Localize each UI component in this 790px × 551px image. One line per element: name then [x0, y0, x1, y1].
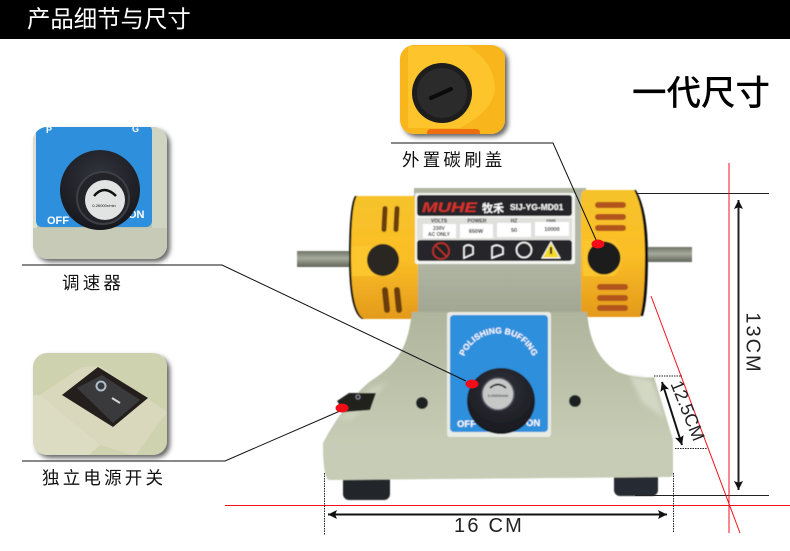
header bar: [0, 0, 790, 39]
inset: speed controller: G: [132, 124, 139, 134]
rating plate: 50: [511, 228, 517, 234]
inset: power switch: [33, 353, 167, 456]
label: carbon brush cover: 外置碳刷盖: [402, 147, 506, 172]
control plate: OFF: [457, 419, 476, 430]
page title: 产品细节与尺寸: [27, 0, 191, 34]
carbon brush cap: [588, 242, 620, 274]
rating plate: POWER: [468, 218, 487, 224]
dimension: width 16 CM: 16 CM: [454, 515, 524, 537]
screws: [416, 395, 581, 409]
rating plate: [415, 193, 575, 264]
left yellow end cap: [349, 196, 418, 319]
leader: speed controller: [22, 265, 466, 381]
right shaft: [645, 247, 692, 262]
label: independent power switch: 独立电源开关: [42, 465, 166, 490]
marker dots: [336, 240, 604, 412]
rating plate: MUHE: [422, 199, 478, 215]
red guide lines: [225, 163, 790, 533]
base top highlights: [338, 376, 664, 420]
inset: speed controller: OFF: [47, 215, 69, 227]
icon: brush cover cap: [412, 63, 472, 123]
inset: speed controller: [33, 124, 167, 260]
dimension: depth 12.5 CM: 12.5CM: [666, 378, 709, 444]
base casting: [323, 312, 673, 480]
control plate: [446, 312, 552, 438]
dimension: width 16 CM: [324, 473, 674, 537]
safety icons: [433, 242, 560, 259]
rating plate: rpm: [546, 218, 556, 224]
speed knob: [467, 368, 535, 434]
motor housing centre: [414, 188, 586, 318]
right yellow end cap: [581, 190, 648, 317]
feet: [343, 466, 658, 500]
left shaft: [297, 251, 352, 267]
plate heading curved: POLISHING BUFFING: [458, 326, 538, 357]
icon: rocker switch: [62, 367, 148, 427]
rating plate: SIJ-YG-MD01: [510, 202, 564, 212]
dimension: height 13 CM: [635, 194, 769, 496]
leader: carbon brush cover: [391, 143, 597, 242]
rating plate: 牧禾: [482, 200, 504, 216]
rocker switch: [337, 393, 376, 412]
rating plate: 10000: [544, 227, 560, 233]
dimension: height 13 CM: 13CM: [742, 312, 764, 374]
rating plate: 650W: [469, 229, 484, 235]
heading: first generation dimensions: 一代尺寸: [632, 65, 770, 115]
icon: speed knob: 0-26000r/min: [92, 203, 116, 208]
product: polishing machine: [296, 188, 693, 501]
inset: carbon brush cover: [400, 45, 505, 136]
rating plate: AC ONLY: [428, 232, 451, 238]
speed knob: 0-26000r/min: [488, 394, 508, 398]
rating plate: HZ: [511, 218, 517, 224]
leader: power switch: [22, 411, 340, 461]
rating plate: VOLTS: [431, 218, 448, 224]
label: speed controller: 调速器: [62, 270, 124, 295]
inset: speed controller: ON: [128, 209, 145, 221]
base front edge: [323, 440, 673, 480]
inset: speed controller: P: [46, 125, 52, 135]
plug: [367, 244, 399, 276]
control plate: ON: [526, 418, 540, 429]
rating plate: 230V: [433, 226, 445, 232]
